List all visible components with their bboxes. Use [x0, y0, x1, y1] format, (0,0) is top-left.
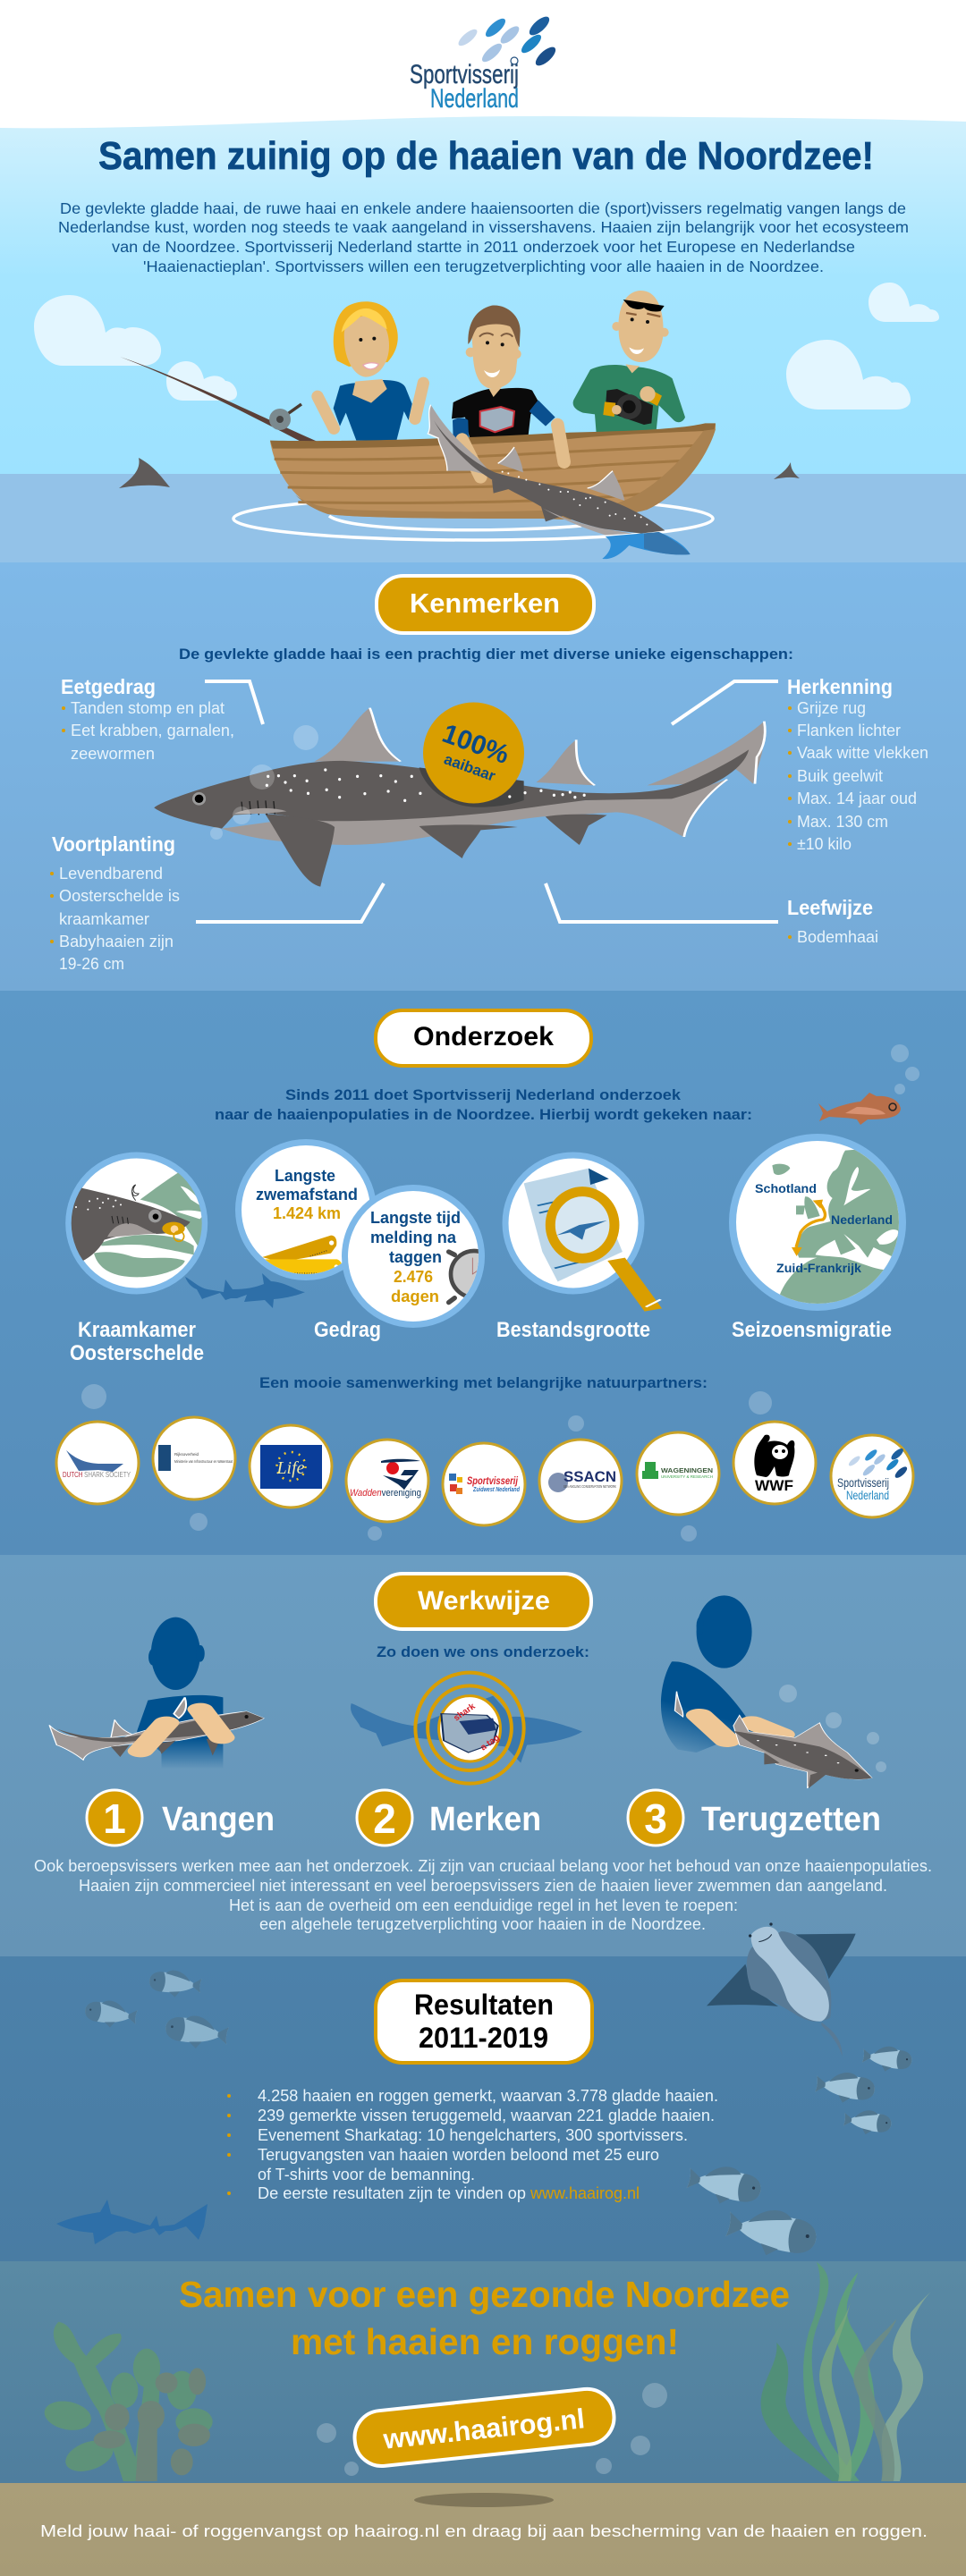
- circle: Langste tijd melding: Langste tijd: [370, 1209, 461, 1227]
- partner: EU Life: Life: [275, 1458, 305, 1478]
- fish: [685, 2160, 764, 2210]
- caught shark over boat: [428, 405, 691, 559]
- results list: Terugvangsten van haaien worden beloond met 25 euro: [258, 2146, 659, 2164]
- step 2: Merken: Merken: [429, 1801, 541, 1838]
- logo: Sportvisserij Nederland: [410, 13, 558, 114]
- circle: Langste zwemafstand: zwemafstand: [256, 1186, 358, 1204]
- text block: Herkenning: Grijze rug: [797, 699, 866, 717]
- text block: Voortplanting: Oosterschelde is: [59, 887, 180, 905]
- heading pill: Resultaten 2011-2019: Resultaten: [414, 1989, 554, 2021]
- partner: WWF: WWF: [755, 1477, 793, 1494]
- text block: Voortplanting: Babyhaaien zijn: [59, 933, 174, 950]
- fish: [724, 2202, 819, 2263]
- step 3: Terugzetten: [628, 1790, 881, 1845]
- partner: Waddenvereniging: [346, 1440, 428, 1522]
- circle labels: Gedrag: [314, 1318, 381, 1342]
- bubbles: [81, 1384, 772, 1541]
- circle: Bestandsgrootte: [505, 1155, 661, 1310]
- fish: [164, 2012, 230, 2053]
- illustration: step 2 tag logo text: shark: [452, 1702, 478, 1723]
- text block: Herkenning: Herkenning: [787, 675, 893, 698]
- person: woman with blond hair: [318, 301, 423, 441]
- partner logos: [56, 1417, 913, 1525]
- intro text: [58, 199, 909, 275]
- partner: Dutch Shark Society: DUTCH SHARK SOCIETY: [63, 1470, 131, 1479]
- text block: Voortplanting: 19-26 cm: [59, 955, 124, 973]
- circle: Langste tijd melding: 2.476: [394, 1268, 433, 1286]
- illustration: step 2 shark with tag: [351, 1673, 582, 1784]
- bubbles: [779, 1685, 886, 1772]
- heading pill: Onderzoek: Onderzoek: [413, 1022, 554, 1052]
- results list: www.haairog.nl: [530, 2184, 640, 2202]
- text block: Leefwijze: [787, 896, 878, 946]
- badge: 100% aaibaar: aaibaar: [442, 750, 498, 785]
- logo: Sportvisserij Nederland: Sportvisserij: [410, 60, 519, 89]
- slogan: Samen voor een gezonde Noordzee: [179, 2274, 790, 2315]
- icon: blue shark silhouette: [185, 1273, 305, 1308]
- circle: Seizoensmigratie map: Zuid-Frankrijk: [776, 1261, 861, 1275]
- step 2: Merken: 2: [373, 1795, 396, 1842]
- partner: Sportvisserij Nederland: Sportvisserij: [837, 1475, 889, 1490]
- shark fin right: [774, 462, 800, 479]
- circle: Seizoensmigratie map: Schotland: [755, 1181, 817, 1195]
- illustration: manta ray: [707, 1922, 856, 2057]
- partner: Rijksoverheid: [153, 1417, 235, 1499]
- badge: 100% aaibaar: [423, 703, 524, 803]
- results list: De eerste resultaten zijn te vinden op: [258, 2184, 526, 2202]
- partner: Sportvisserij Nederland: [831, 1435, 913, 1517]
- panel: onderzoek: [0, 991, 966, 1555]
- shark fin left: [119, 458, 170, 488]
- text block: explanation: Ook beroepsvissers werken mee aan het onderzoek. Zij zijn van cruciaal belang voor het behoud van onze haaienpopulaties.: [34, 1857, 932, 1875]
- text block: explanation: een algehele terugzetverplichting voor haaien in de Noordzee.: [259, 1915, 706, 1933]
- boat: [270, 423, 716, 519]
- text block: Herkenning: ±10 kilo: [797, 835, 852, 853]
- illustration: step 2 tag logo text: [452, 1702, 502, 1753]
- heading pill: Kenmerken: Kenmerken: [410, 587, 560, 619]
- circle: Kraamkamer Oosterschelde: [65, 1155, 208, 1291]
- scene: people in boat: [270, 291, 716, 559]
- slogan: [179, 2274, 790, 2362]
- circle: Langste tijd melding: dagen: [391, 1288, 439, 1305]
- text block: Voortplanting: [50, 832, 180, 973]
- partner: Dutch Shark Society: [56, 1422, 139, 1504]
- bubbles: [210, 725, 318, 840]
- text block: Leefwijze: Bodemhaai: [797, 928, 878, 946]
- circle: Langste tijd melding: melding na: [370, 1229, 457, 1246]
- icon: brown fish with bubbles: [818, 1044, 919, 1125]
- seaweed right: [761, 2262, 930, 2481]
- partner: Waddenvereniging: Waddenvereniging: [350, 1488, 421, 1499]
- fish school: [83, 1968, 913, 2263]
- step 1: Vangen: [87, 1790, 275, 1845]
- call to action text: Meld jouw haai- of roggenvangst op haairog.nl en draag bij aan bescherming van de haaien en roggen.: [40, 2521, 928, 2540]
- intro text: Sinds 2011 doet Sportvisserij Nederland onderzoek: [285, 1086, 682, 1103]
- heading pill: Resultaten 2011-2019: 2011-2019: [419, 2022, 548, 2054]
- partner: Sportvisserij Nederland: Nederland: [846, 1488, 889, 1502]
- intro text: [215, 1086, 752, 1123]
- text block: Herkenning: [787, 675, 928, 853]
- button: www.haairog.nl: [352, 2386, 616, 2469]
- fish: [843, 2107, 893, 2137]
- results list: 239 gemerkte vissen teruggemeld, waarvan 221 gladde haaien.: [258, 2107, 715, 2124]
- circle: Langste zwemafstand: [238, 1143, 374, 1285]
- partner: Sportvisserij Zuidwest Nederland: Zuidwest Nederland: [472, 1487, 521, 1493]
- slogan: met haaien en roggen!: [291, 2321, 679, 2362]
- icon: shark silhouette: [56, 2200, 208, 2244]
- step 2: Merken: [357, 1790, 541, 1845]
- title: Samen zuinig op de haaien van de Noordzee!: [98, 134, 874, 178]
- intro text: 'Haaienactieplan'. Sportvissers willen een terugzetverplichting voor alle haaien in de Noordzee.: [143, 258, 824, 275]
- text block: Herkenning: Buik geelwit: [797, 767, 883, 785]
- heading pill: Onderzoek: [376, 1010, 591, 1066]
- badge: 100% aaibaar: 100%: [438, 719, 513, 770]
- step 3: Terugzetten: Terugzetten: [701, 1801, 881, 1838]
- shadow of button: [414, 2493, 554, 2507]
- text block: explanation: Haaien zijn commercieel niet interessant en veel beroepsvissers zien de haaien liever zwemmen dan aangeland.: [79, 1877, 887, 1895]
- text block: Voortplanting: Voortplanting: [52, 832, 175, 856]
- results list: [227, 2087, 718, 2202]
- text block: Herkenning: Flanken lichter: [797, 722, 901, 739]
- text block: Voortplanting: Levendbarend: [59, 865, 163, 883]
- fish: [148, 1968, 202, 2000]
- partners heading: Een mooie samenwerking met belangrijke natuurpartners:: [259, 1374, 708, 1391]
- circle labels: [70, 1318, 892, 1365]
- person: man in black shirt: [452, 306, 555, 439]
- panel: sand seabed: [0, 2483, 966, 2576]
- fish: [861, 2044, 913, 2074]
- partner: EU Life: [250, 1425, 332, 1508]
- text block: explanation: [34, 1857, 932, 1933]
- callout lines: [196, 681, 778, 922]
- heading pill: Kenmerken: [377, 576, 594, 633]
- person: bald man with camera: [573, 291, 685, 434]
- intro text: naar de haaienpopulaties in de Noordzee. Hierbij wordt gekeken naar:: [215, 1106, 752, 1123]
- partner: Rijksoverheid: Ministerie van Infrastructuur en Waterstaat: [174, 1459, 233, 1464]
- subtitle: De gevlekte gladde haai is een prachtig dier met diverse unieke eigenschappen:: [179, 646, 793, 663]
- text block: Eetgedrag: Eet krabben, garnalen,: [71, 722, 234, 739]
- fishing rod: [120, 357, 322, 450]
- text block: Eetgedrag: Tanden stomp en plat: [71, 699, 225, 717]
- partner: Wageningen: [637, 1432, 719, 1515]
- clouds: [34, 283, 939, 410]
- step 1: Vangen: 1: [103, 1795, 126, 1842]
- heading pill: Werkwijze: [376, 1574, 591, 1629]
- step 1: Vangen: Vangen: [162, 1801, 275, 1838]
- text block: Leefwijze: Leefwijze: [787, 896, 873, 919]
- text block: Eetgedrag: Eetgedrag: [61, 675, 156, 698]
- partner: Rijksoverheid: Rijksoverheid: [174, 1452, 199, 1457]
- panel: werkwijze: [0, 1555, 966, 1956]
- circle: Langste tijd melding: taggen: [389, 1248, 442, 1266]
- results list: 4.258 haaien en roggen gemerkt, waarvan 3.778 gladde haaien.: [258, 2087, 718, 2105]
- circle: Langste zwemafstand: 1.424 km: [273, 1204, 341, 1222]
- circle: Langste zwemafstand: Langste: [275, 1167, 335, 1185]
- circle labels: Seizoensmigratie: [732, 1318, 892, 1342]
- logo: Sportvisserij Nederland: Nederland: [430, 84, 519, 114]
- intro text: van de Noordzee. Sportvisserij Nederland startte in 2011 onderzoek voor het Europese en Nederlandse: [112, 238, 855, 256]
- circle labels: Bestandsgrootte: [496, 1318, 650, 1342]
- partner: Wageningen: WAGENINGEN: [661, 1466, 713, 1474]
- panel: header sky and sea: [0, 0, 966, 563]
- panel: resultaten: [0, 1922, 966, 2263]
- partner: SSACN: SEA ANGLING CONSERVATION NETWORK: [564, 1484, 616, 1489]
- text block: Herkenning: Vaak witte vlekken: [797, 744, 928, 762]
- results list: Evenement Sharkatag: 10 hengelcharters, 300 sportvissers.: [258, 2126, 688, 2144]
- heading pill: Werkwijze: Werkwijze: [418, 1586, 550, 1616]
- partner: Sportvisserij Zuidwest Nederland: [443, 1443, 525, 1525]
- circle labels: Kraamkamer: [78, 1318, 196, 1342]
- water rings: [233, 497, 713, 540]
- illustration: spotted smooth-hound shark: [154, 708, 765, 887]
- text block: Eetgedrag: [61, 675, 234, 763]
- intro text: De gevlekte gladde haai, de ruwe haai en enkele andere haaiensoorten die (sport)vissers regelmatig vangen langs de: [60, 199, 906, 217]
- button: www.haairog.nl: www.haairog.nl: [381, 2403, 586, 2455]
- text block: Eetgedrag: zeewormen: [71, 745, 155, 763]
- panel: kenmerken: [0, 562, 966, 991]
- text block: Herkenning: Max. 14 jaar oud: [797, 790, 917, 807]
- partner: SSACN: SSACN: [564, 1468, 616, 1485]
- illustration: step 2 tag logo text: a tag: [479, 1733, 502, 1753]
- heading pill: Resultaten 2011-2019: [376, 1981, 592, 2063]
- text block: Herkenning: Max. 130 cm: [797, 813, 888, 831]
- text block: explanation: Het is aan de overheid om een eenduidige regel in het leven te roepen:: [229, 1896, 738, 1914]
- circle: Seizoensmigratie map: [729, 1134, 906, 1311]
- intro text: Nederlandse kust, worden nog steeds te vaak aangeland in vissershavens. Haaien zijn belangrijk voor het ecosysteem: [58, 218, 909, 236]
- partner: SSACN: [539, 1440, 622, 1522]
- illustration: step 3 releasing a shark: [661, 1595, 872, 1788]
- panel: closing call to action: [0, 2261, 966, 2483]
- partner: Sportvisserij Zuidwest Nederland: Sportvisserij: [467, 1474, 519, 1487]
- fish: [83, 1997, 139, 2031]
- fish: [814, 2069, 877, 2106]
- circle: Seizoensmigratie map: Nederland: [831, 1212, 893, 1227]
- subtitle: Zo doen we ons onderzoek:: [377, 1643, 589, 1660]
- partner: WWF: [733, 1422, 816, 1504]
- bubbles: [317, 2383, 667, 2476]
- circle: Langste tijd melding: [345, 1187, 497, 1325]
- step 3: Terugzetten: 3: [644, 1795, 667, 1842]
- results list: of T-shirts voor de bemanning.: [258, 2166, 475, 2183]
- seaweed left: [37, 2322, 213, 2481]
- circle labels: Oosterschelde: [70, 1341, 204, 1365]
- partner: Wageningen: UNIVERSITY & RESEARCH: [661, 1474, 713, 1479]
- text block: Voortplanting: kraamkamer: [59, 910, 149, 928]
- illustration: step 1 catching a shark: [49, 1617, 264, 1769]
